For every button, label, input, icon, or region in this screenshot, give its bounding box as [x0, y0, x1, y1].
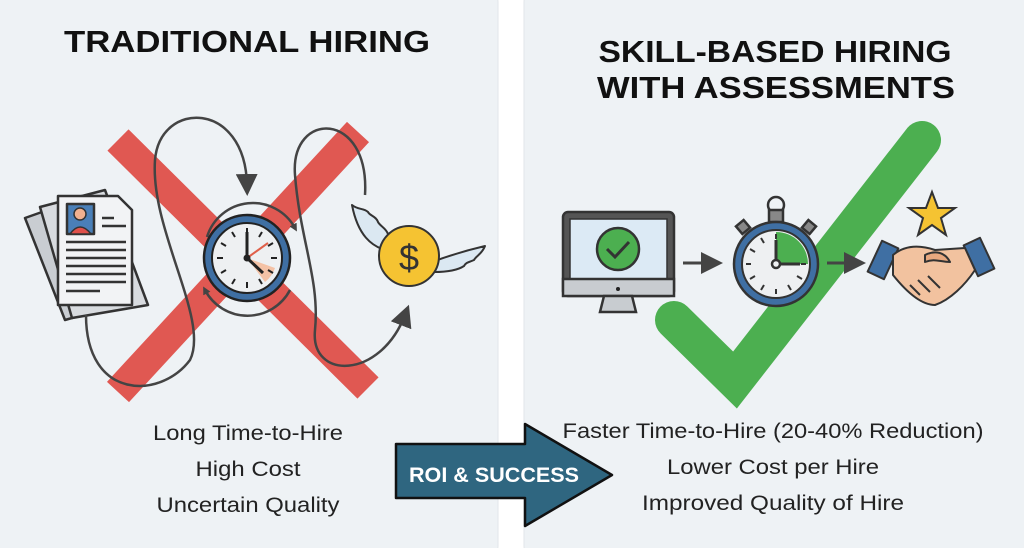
icon: red X — [118, 132, 368, 392]
text: skill-based benefits: Faster Time-to-Hire (20-40% Reduction) — [562, 420, 984, 443]
text: traditional drawbacks: Long Time-to-Hire — [153, 422, 343, 445]
panel: traditional hiring — [0, 0, 498, 548]
icon: clock — [204, 215, 290, 301]
arrow: ROI & success — [396, 424, 612, 526]
icon: star — [909, 192, 955, 235]
arrow: monitor to stopwatch — [683, 262, 712, 264]
text: skill-based benefits: Lower Cost per Hire — [667, 456, 879, 479]
title: skill-based hiring — [597, 34, 955, 105]
icon: stopwatch — [734, 197, 818, 306]
text: traditional drawbacks: Uncertain Quality — [156, 494, 340, 517]
title: skill-based hiring: SKILL-BASED HIRING — [598, 34, 952, 69]
text: skill-based benefits — [562, 420, 984, 515]
icon: flying money coin — [352, 205, 485, 286]
arrows: looping process — [86, 118, 405, 386]
title: traditional hiring: TRADITIONAL HIRING — [64, 24, 430, 59]
title: skill-based hiring: WITH ASSESSMENTS — [597, 70, 955, 105]
text: skill-based benefits: Improved Quality of Hire — [642, 492, 904, 515]
arrow: ROI & success: ROI & SUCCESS — [409, 464, 579, 487]
panel: skill-based hiring — [524, 0, 1024, 548]
arrow: stopwatch to handshake — [827, 262, 855, 264]
icon: flying money coin: $ — [399, 237, 419, 278]
icon: handshake — [868, 238, 994, 305]
icon: green checkmark — [674, 140, 922, 380]
icon: monitor with check — [563, 212, 674, 312]
text: traditional drawbacks — [153, 422, 343, 517]
text: traditional drawbacks: High Cost — [196, 458, 301, 481]
icon: resume stack — [25, 190, 148, 320]
